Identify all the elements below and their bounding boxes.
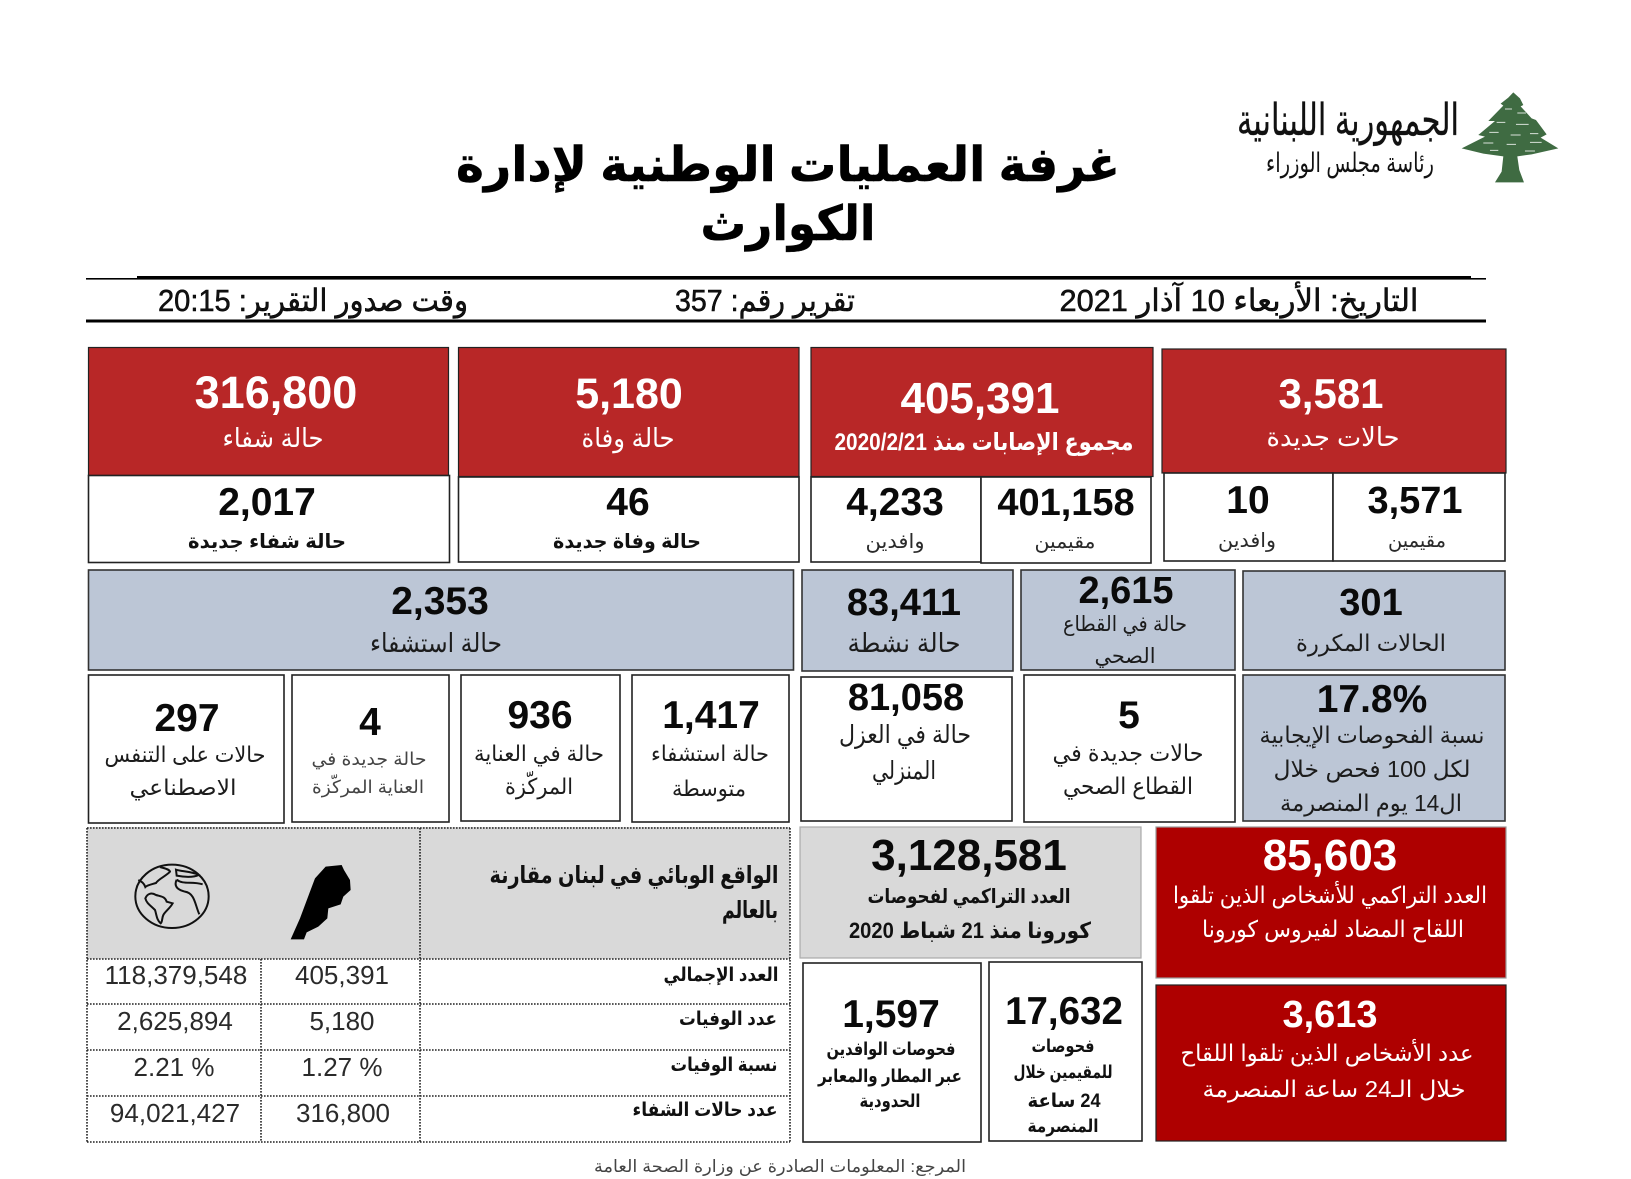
panel: ICU cases: المركّزة xyxy=(505,771,573,799)
panel: total cases xyxy=(811,348,1153,563)
panel: cumulative tests: العدد التراكمي لفحوصات xyxy=(868,886,1070,909)
table heading: الواقع الوبائي في لبنان مقارنة xyxy=(490,862,778,889)
panel: total cases: مجموع الإصابات منذ 2020/2/21 xyxy=(834,429,1134,456)
panel: health sector cases: الصحي xyxy=(1094,645,1156,668)
total arrivals xyxy=(811,477,981,562)
panel: ventilators: حالات على التنفس xyxy=(104,742,266,768)
panel: resident tests: 17,632 xyxy=(1005,990,1123,1033)
source note: المرجع: المعلومات الصادرة عن وزارة الصحة العامة xyxy=(594,1157,966,1177)
panel: recoveries: 316,800 xyxy=(195,367,357,418)
panel: resident tests xyxy=(989,962,1142,1141)
new recoveries: حالة شفاء جديدة xyxy=(188,531,346,553)
row: recoveries: عدد حالات الشفاء xyxy=(632,1100,778,1121)
panel: moderate hospital cases: 1,417 xyxy=(662,694,760,737)
panel: positivity rate: 17.8% xyxy=(1317,678,1427,721)
panel: health sector cases: 2,615 xyxy=(1078,570,1174,612)
panel: arrival tests xyxy=(803,963,981,1142)
report number: تقرير رقم: 357 xyxy=(675,283,855,319)
panel: home isolation xyxy=(801,677,1012,821)
logo: Lebanese Republic presidency of council of ministers xyxy=(1237,92,1558,182)
total arrivals: 4,233 xyxy=(846,481,944,524)
total residents xyxy=(981,477,1151,563)
panel: home isolation: حالة في العزل xyxy=(839,721,971,749)
row: deaths: 2,625,894 xyxy=(117,1006,233,1036)
panel: ICU cases: 936 xyxy=(507,694,573,737)
new residents: مقيمين xyxy=(1388,530,1446,552)
panel: new cases: 3,581 xyxy=(1278,370,1384,417)
panel: hospitalised: حالة استشفاء xyxy=(370,628,502,658)
panel: new ICU cases: 4 xyxy=(359,701,381,744)
row: death rate: 2.21 % xyxy=(134,1052,214,1082)
panel: deaths: حالة وفاة xyxy=(582,423,674,454)
panel: active cases: حالة نشطة xyxy=(848,628,960,658)
report date: التاريخ: الأربعاء 10 آذار 2021 xyxy=(1060,281,1419,319)
panel: cumulative tests: 3,128,581 xyxy=(871,831,1067,880)
row: total: 405,391 xyxy=(295,960,389,990)
panel: vaccinated in last 24 hours: 3,613 xyxy=(1282,994,1378,1036)
new arrivals: 10 xyxy=(1226,479,1270,522)
table heading: بالعالم xyxy=(722,897,778,924)
title: الكوارث xyxy=(700,198,876,252)
panel: active cases xyxy=(802,570,1013,671)
row: deaths: عدد الوفيات xyxy=(679,1009,777,1030)
panel: ventilators xyxy=(88,675,284,823)
panel: cumulative vaccinated: العدد التراكمي للأشخاص الذين تلقوا xyxy=(1173,881,1487,909)
new arrivals: وافدين xyxy=(1218,530,1276,552)
new residents: 3,571 xyxy=(1367,480,1463,522)
panel: repeated cases xyxy=(1243,571,1505,670)
panel: positivity rate: نسبة الفحوصات الإيجابية xyxy=(1260,722,1484,749)
panel: repeated cases: 301 xyxy=(1339,582,1403,624)
panel: home isolation: المنزلي xyxy=(872,757,936,785)
panel: recoveries: حالة شفاء xyxy=(222,423,324,453)
row: total: العدد الإجمالي xyxy=(664,965,778,986)
row: total xyxy=(105,960,778,990)
panel: positivity rate xyxy=(1243,675,1505,821)
total arrivals: وافدين xyxy=(866,531,924,553)
panel: new health sector cases: حالات جديدة في xyxy=(1052,740,1204,767)
total residents: 401,158 xyxy=(997,482,1135,524)
panel: recoveries xyxy=(88,348,450,562)
panel: new health sector cases: القطاع الصحي xyxy=(1063,773,1193,800)
icon: globe xyxy=(135,865,209,928)
panel: new cases: حالات جديدة xyxy=(1266,422,1400,452)
icon: map of Lebanon xyxy=(291,865,351,939)
panel: repeated cases: الحالات المكررة xyxy=(1296,630,1446,657)
panel: health sector cases xyxy=(1021,570,1235,670)
row: recoveries: 94,021,427 xyxy=(110,1098,240,1128)
new recoveries xyxy=(88,476,450,562)
table: Lebanon versus the world xyxy=(87,827,790,1142)
panel: moderate hospital cases xyxy=(632,675,789,822)
row: recoveries: 316,800 xyxy=(296,1098,390,1128)
panel: ventilators: 297 xyxy=(154,697,220,740)
panel: arrival tests: 1,597 xyxy=(842,993,940,1036)
panel: new ICU cases: حالة جديدة في xyxy=(312,749,426,770)
panel: hospitalised: 2,353 xyxy=(391,580,489,623)
report time: وقت صدور التقرير: 20:15 xyxy=(158,283,468,319)
row: deaths: 5,180 xyxy=(309,1006,375,1036)
new deaths xyxy=(458,477,799,562)
panel: home isolation: 81,058 xyxy=(848,677,964,719)
panel: health sector cases: حالة في القطاع xyxy=(1063,613,1187,636)
panel: vaccinated in last 24 hours: عدد الأشخاص الذين تلقوا اللقاح xyxy=(1180,1039,1474,1067)
calligraphy: presidency line: رئاسة مجلس الوزراء xyxy=(1266,148,1434,179)
panel: arrival tests: عبر المطار والمعابر xyxy=(817,1066,962,1087)
panel: cumulative tests xyxy=(800,827,1141,958)
panel: cumulative tests: كورونا منذ 21 شباط 2020 xyxy=(849,918,1091,944)
panel: resident tests: المنصرمة xyxy=(1028,1116,1098,1137)
panel: hospitalised xyxy=(88,570,794,670)
panel: active cases: 83,411 xyxy=(847,582,961,624)
panel: cumulative vaccinated: 85,603 xyxy=(1263,831,1397,880)
panel: positivity rate: ال14 يوم المنصرمة xyxy=(1280,790,1462,817)
panel: total cases: 405,391 xyxy=(900,374,1060,423)
panel: ICU cases xyxy=(461,675,620,821)
panel: deaths: 5,180 xyxy=(575,370,683,418)
panel: new health sector cases: 5 xyxy=(1118,694,1140,737)
panel: new health sector cases xyxy=(1024,675,1235,822)
title: غرفة العمليات الوطنية لإدارة xyxy=(456,139,1120,193)
panel: resident tests: فحوصات xyxy=(1032,1036,1094,1057)
panel: new cases xyxy=(1162,349,1506,561)
panel: ICU cases: حالة في العناية xyxy=(474,741,604,767)
panel: arrival tests: فحوصات الوافدين xyxy=(826,1039,956,1060)
total residents: مقيمين xyxy=(1034,531,1096,553)
panel: resident tests: 24 ساعة xyxy=(1028,1091,1101,1112)
row: recoveries xyxy=(110,1098,778,1128)
new arrivals xyxy=(1164,473,1333,561)
panel: vaccinated in last 24 hours xyxy=(1156,985,1506,1141)
new deaths: 46 xyxy=(606,481,650,524)
panel: cumulative vaccinated: اللقاح المضاد لفيروس كورونا xyxy=(1202,916,1464,943)
panel: cumulative vaccinated xyxy=(1156,827,1506,978)
panel: new ICU cases: العناية المركّزة xyxy=(312,774,424,798)
panel: ventilators: الاصطناعي xyxy=(130,775,236,801)
panel: arrival tests: الحدودية xyxy=(860,1091,920,1112)
new residents xyxy=(1333,473,1505,561)
calligraphy: republic name: الجمهورية اللبنانية xyxy=(1237,96,1459,146)
row: death rate: 1.27 % xyxy=(302,1052,382,1082)
row: deaths xyxy=(117,1006,777,1036)
panel: new ICU cases xyxy=(292,675,449,822)
row: total: 118,379,548 xyxy=(105,960,247,990)
new deaths: حالة وفاة جديدة xyxy=(553,531,701,553)
panel: moderate hospital cases: متوسطة xyxy=(672,776,746,801)
panel: deaths xyxy=(458,348,799,562)
row: death rate: نسبة الوفيات xyxy=(670,1055,778,1076)
report meta bar xyxy=(86,276,1486,322)
panel: moderate hospital cases: حالة استشفاء xyxy=(651,741,769,766)
table heading xyxy=(490,862,778,924)
icon: cedar tree xyxy=(1462,92,1558,182)
row: death rate xyxy=(134,1052,778,1082)
panel: resident tests: للمقيمين خلال xyxy=(1014,1062,1112,1083)
title xyxy=(456,139,1120,252)
panel: positivity rate: لكل 100 فحص خلال xyxy=(1274,756,1470,783)
new recoveries: 2,017 xyxy=(218,481,316,524)
panel: vaccinated in last 24 hours: خلال الـ24 ساعة المنصرمة xyxy=(1202,1076,1466,1103)
